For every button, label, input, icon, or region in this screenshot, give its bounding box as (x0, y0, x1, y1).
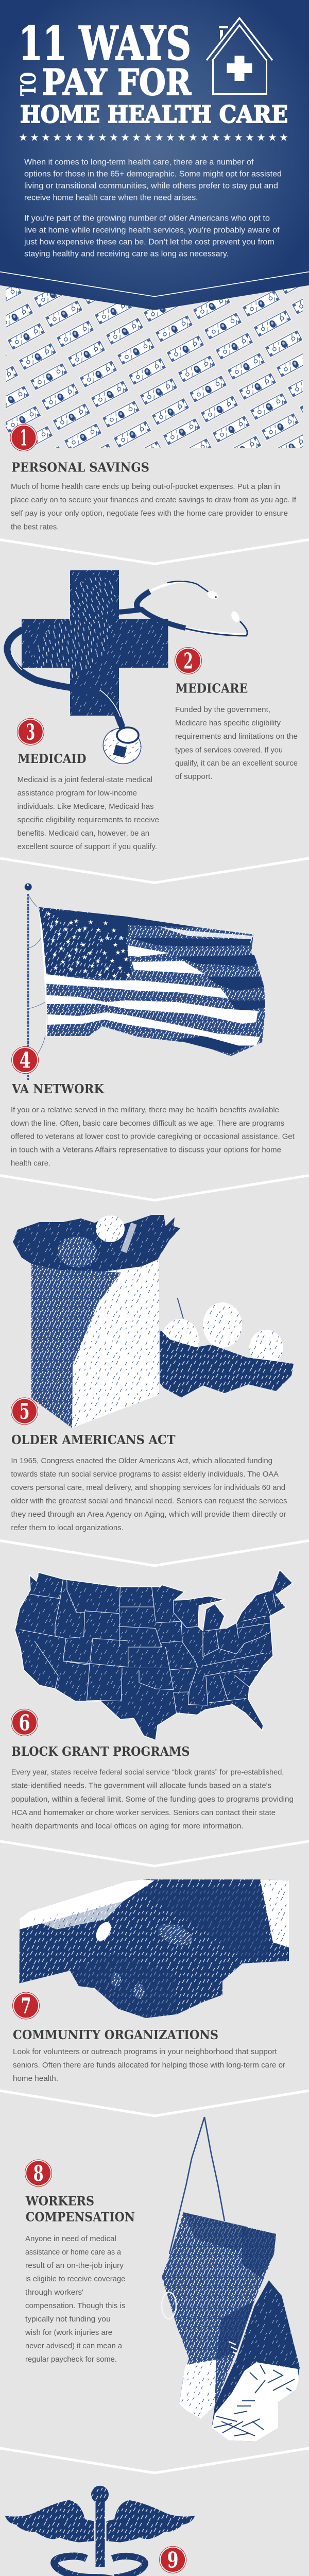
header background (0, 0, 309, 310)
body text: older americans act: In 1965, Congress enacted the Older Americans Act, which allocated funding (11, 1457, 272, 1465)
panel: header (0, 0, 309, 310)
badge: 8: 8 (33, 2161, 44, 2186)
intro text: receive home health care when the need arises. (24, 193, 198, 202)
badge: 2: 2 (183, 648, 193, 674)
panel: block grant programs (11, 1570, 294, 1831)
illustration: hanging work boots (162, 2117, 300, 2442)
intro text: living or transitional communities, while others prefer to stay put and (24, 181, 278, 190)
body text: community organizations: home health. (13, 2075, 58, 2083)
intro text: If you’re part of the growing number of older Americans who opt to (24, 214, 270, 223)
body text: community organizations: Look for volunteers or outreach programs in your neighborhood that support (13, 2048, 277, 2056)
body text: personal savings: place early on to secure your finances and create savings to draw from as you age. If (11, 496, 297, 504)
body text: block grant programs: health departments and local offices on aging for more information. (11, 1822, 244, 1831)
body text: va network: If you or a relative served in the military, there may be health benefits available (11, 1106, 279, 1114)
heading: va network: VA NETWORK (11, 1081, 105, 1096)
body text: workers compensation: never advised) it can mean a (25, 2342, 123, 2350)
body text: older americans act: covers personal care, meal delivery, and shopping services for individuals 60 and (11, 1484, 285, 1492)
body text: workers compensation: wish for (work injuries are (25, 2329, 112, 2337)
badge: 6 (11, 1709, 38, 1736)
title (16, 16, 288, 128)
body text: medicaid: benefits. Medicaid can, however, be an (18, 829, 149, 838)
badge: 3 (17, 718, 44, 745)
badge: 3: 3 (26, 719, 35, 744)
body text: medicare: types of services covered. If you (175, 746, 283, 754)
title: HOME HEALTH CARE (20, 100, 288, 128)
badge: 6: 6 (19, 1710, 30, 1735)
heading: medicare: MEDICARE (176, 681, 248, 696)
panel: health insurance (5, 2486, 301, 2576)
illustration: handshake (20, 1879, 289, 2018)
body text: medicaid: excellent source of support if you qualify. (18, 843, 157, 851)
heading: workers compensation (25, 2194, 135, 2225)
body text: personal savings: self pay is your only option, negotiate fees with the home care provider to ensure (11, 510, 288, 518)
icon: house with medical cross (207, 18, 272, 94)
panel: workers compensation (25, 2117, 300, 2442)
body text: medicare: of support. (175, 773, 212, 781)
badge: 9 (160, 2546, 186, 2573)
body text: workers compensation: assistance or home care as a (25, 2248, 122, 2257)
body text: workers compensation: regular paycheck for some. (25, 2355, 117, 2364)
body text: personal savings: Much of home health care ends up being out-of-pocket expenses. Put a plan in (11, 483, 280, 491)
body text: personal savings: the best rates. (11, 523, 59, 531)
badge: 4 (12, 1047, 39, 1074)
heading: workers compensation: COMPENSATION (26, 2210, 135, 2225)
illustration: grocery bag and fruit (13, 1215, 294, 1428)
badge: 5: 5 (20, 1399, 30, 1424)
body text: block grant programs: population, within a federal limit. Some of the funding goes to programs providing (11, 1795, 294, 1804)
body text: medicare: requirements and limitations on the (175, 733, 298, 741)
title: 11 WAYS (19, 16, 191, 70)
illustration: map of the united states (15, 1570, 293, 1740)
intro text: When it comes to long-term health care, there are a number of (24, 158, 254, 167)
body text: va network (11, 1106, 295, 1168)
body text: workers compensation: compensation. Though this is (25, 2302, 125, 2310)
body text: medicaid (18, 776, 159, 851)
body text: va network: down the line. Often, basic care becomes difficult as we age. There are programs (11, 1120, 284, 1128)
body text: block grant programs (11, 1769, 294, 1831)
body text: workers compensation: Anyone in need of medical (25, 2235, 116, 2243)
body text: older americans act (11, 1457, 287, 1532)
body text: va network: in touch with a Veterans Affairs representative to discuss your options for home (11, 1146, 281, 1155)
badge: 9: 9 (167, 2547, 179, 2572)
body text: older americans act: towards state run social service programs to assist elderly individuals. The OAA (11, 1470, 279, 1479)
intro text (24, 158, 282, 259)
body text: medicare: qualify, it can be an excellent source (175, 759, 298, 768)
body text: block grant programs: state-identified needs. The government will allocate funds based on a state's (11, 1782, 271, 1790)
body text: workers compensation: result of an on-the-job injury (25, 2262, 124, 2270)
heading: community organizations: COMMUNITY ORGANIZATIONS (13, 2027, 218, 2042)
star row (19, 133, 288, 141)
panel: medicare and medicaid (7, 567, 298, 851)
heading: older americans act: OLDER AMERICANS ACT (11, 1432, 176, 1447)
illustration: caduceus (5, 2486, 195, 2576)
intro text: staying healthy and receiving care as long as necessary. (24, 250, 229, 259)
heading: block grant programs: BLOCK GRANT PROGRAMS (11, 1744, 190, 1759)
illustration: cross and stethoscope (7, 567, 247, 769)
intro text: options for those in the 65+ demographic. Some might opt for assisted (24, 170, 282, 178)
body text: medicare: Funded by the government, (175, 706, 270, 714)
illustration: rotated dollar bills (6, 286, 303, 448)
body text: medicaid: specific eligibility requirements to receive (18, 816, 159, 824)
body text: medicare (175, 706, 298, 781)
illustration: american flag (25, 883, 265, 1080)
heading: workers compensation: WORKERS (25, 2194, 94, 2209)
body text: personal savings (11, 483, 297, 531)
title: TO (16, 72, 41, 96)
title: PAY FOR (42, 62, 192, 104)
badge: 1: 1 (20, 426, 27, 450)
body text: workers compensation: is eligible to receive coverage (25, 2275, 125, 2283)
body text: workers compensation: through workers' (25, 2289, 83, 2297)
body text: workers compensation (25, 2235, 125, 2364)
body text: block grant programs: HCA and homemaker or chore worker services. Seniors can contact their state (11, 1809, 276, 1817)
heading: personal savings: PERSONAL SAVINGS (11, 460, 149, 474)
body text: older americans act: they need through an Area Agency on Aging, which will provide them directly or (11, 1511, 286, 1519)
body text: community organizations: seniors. Often there are funds allocated for helping those with long-term care or (13, 2061, 285, 2070)
body text: va network: health care. (11, 1160, 50, 1168)
panel: older americans act (11, 1215, 294, 1532)
badge: 2 (175, 647, 202, 674)
badge: 8 (25, 2160, 52, 2187)
badge: 5 (11, 1398, 38, 1425)
body text: block grant programs: Every year, states receive federal social service “block grants” for pre-established, (11, 1769, 284, 1777)
badge: 1 (10, 425, 37, 451)
heading: medicaid: MEDICAID (18, 751, 87, 766)
panel: personal savings (6, 286, 303, 530)
badge: 7 (12, 1992, 39, 2019)
intro text: just how expensive these can be. Don’t let the cost prevent you from (24, 238, 274, 247)
body text: medicaid: assistance program for low-income (18, 789, 137, 798)
badge: 4: 4 (20, 1048, 31, 1073)
panel: community organizations (12, 1879, 289, 2083)
body text: medicare: Medicare has specific eligibility (175, 719, 281, 727)
badge: 7: 7 (21, 1993, 31, 2019)
body text: workers compensation: typically not funding you (25, 2315, 111, 2324)
body text: va network: offered to veterans at lower cost to provide caregiving or occasional assistance. Get (11, 1133, 295, 1141)
body text: medicaid: individuals. Like Medicare, Medicaid has (18, 803, 153, 811)
body text: community organizations (13, 2048, 285, 2083)
body text: older americans act: older with the greatest social and financial need. Seniors can request the services (11, 1497, 287, 1505)
body text: older americans act: refer them to local organizations. (11, 1524, 124, 1532)
body text: medicaid: Medicaid is a joint federal-state medical (18, 776, 152, 784)
intro text: live at home while receiving health services, you’re probably aware of (24, 226, 280, 235)
panel: va network (11, 883, 295, 1168)
